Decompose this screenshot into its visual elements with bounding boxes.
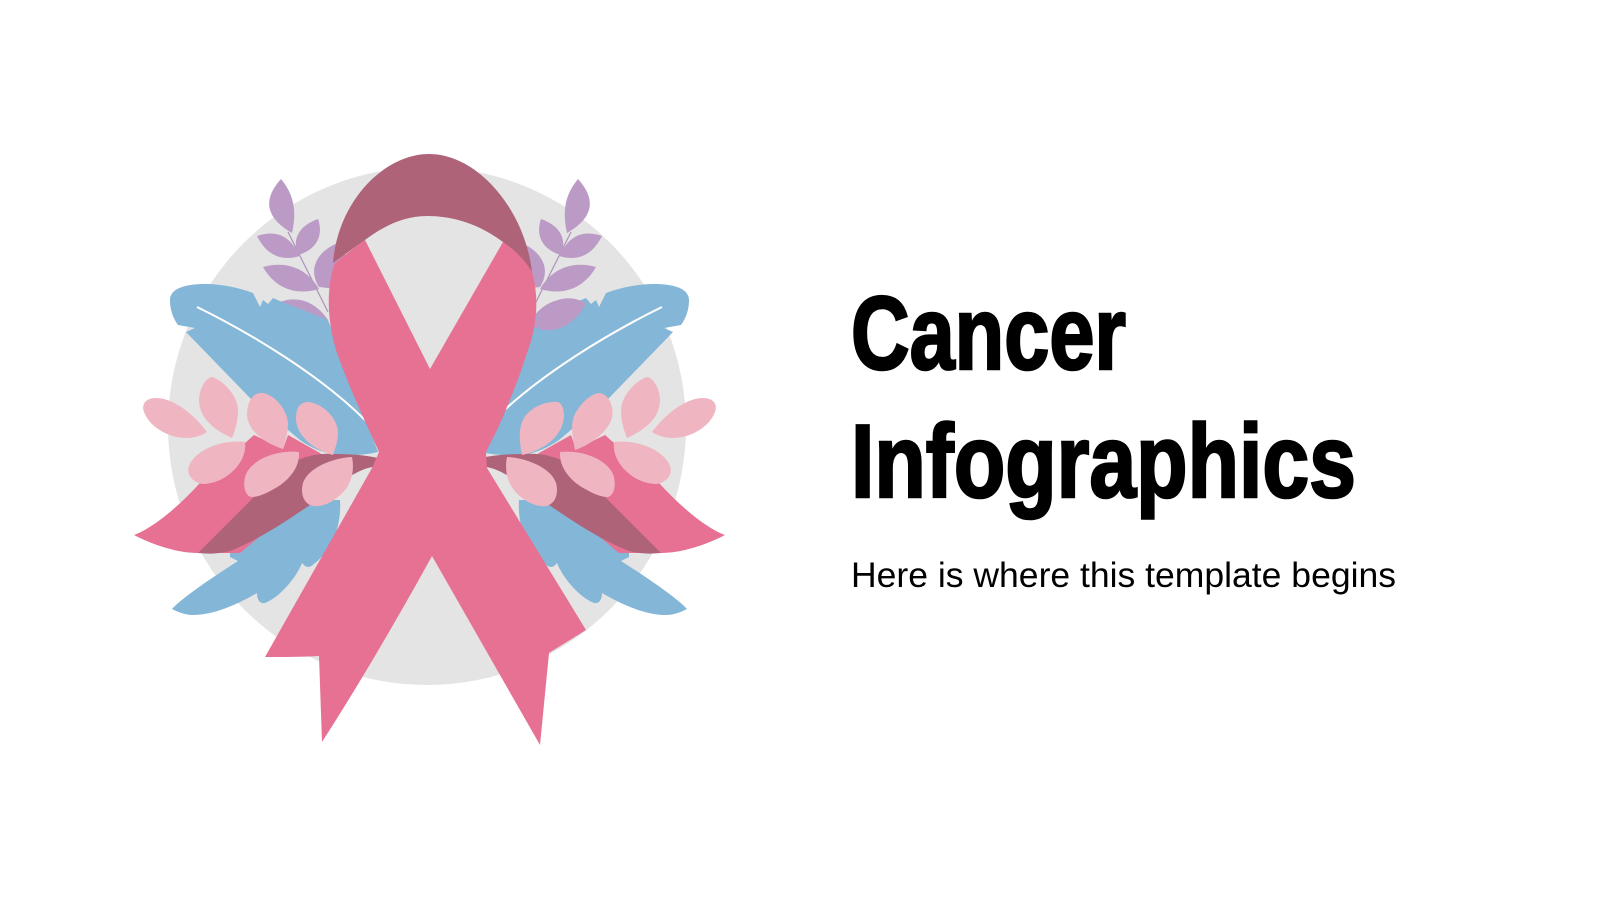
- ribbon body: [265, 240, 586, 745]
- grey background circle: [168, 167, 686, 685]
- dark wing: [198, 454, 378, 554]
- title: Cancer: [851, 276, 1126, 392]
- blue lower feather: [172, 500, 340, 615]
- pink wing: [134, 435, 340, 553]
- light pink leaves: [143, 377, 353, 506]
- illustration: awareness ribbon with foliage: [134, 154, 725, 745]
- right side foliage: [481, 179, 725, 615]
- left side foliage: [134, 179, 378, 615]
- subtitle: Here is where this template begins: [851, 556, 1396, 595]
- right purple leaf: [533, 298, 586, 330]
- left centre leaves: [247, 393, 338, 455]
- ribbon loop: [333, 154, 532, 272]
- title: [851, 276, 1356, 520]
- right centre leaves: [520, 393, 612, 455]
- title: Infographics: [851, 404, 1356, 520]
- feather quill: [197, 307, 365, 420]
- blue upper feather: [170, 284, 378, 455]
- purple sprig: [257, 179, 345, 325]
